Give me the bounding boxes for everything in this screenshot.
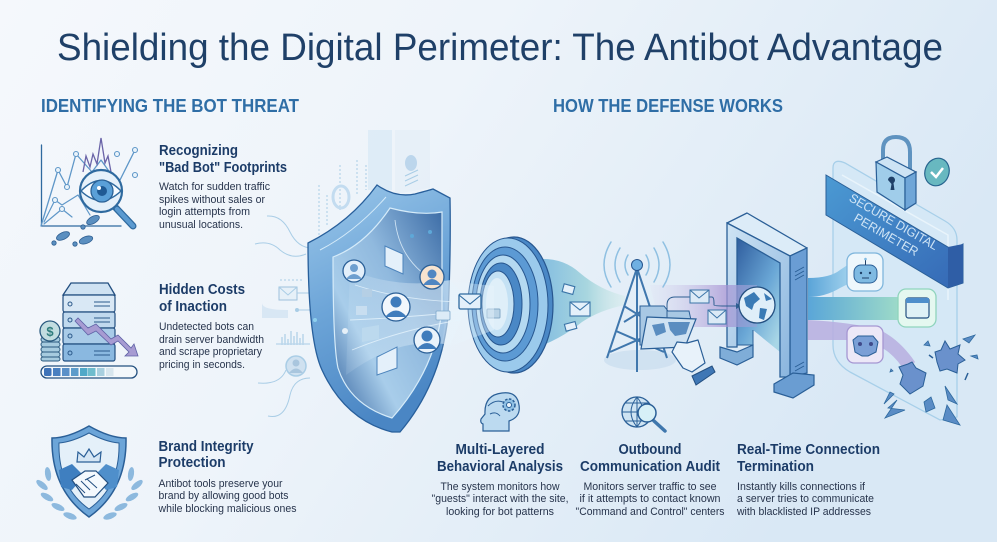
icon: globe <box>739 287 775 323</box>
text block: outbound communication audit: Monitors server traffic to see <box>584 481 716 493</box>
text block: real-time connection termination: Real-Time Connection <box>737 442 880 458</box>
text block: hidden costs of inaction <box>159 282 264 371</box>
text block: real-time connection termination: Instantly kills connections if <box>737 481 866 493</box>
text block: outbound communication audit: if it attempts to contact known <box>580 493 720 505</box>
funnel: traffic beam from ring to tower <box>530 259 625 350</box>
cards: robot, window and bad bot <box>847 253 936 363</box>
text block: recognizing bad bot footprints: "Bad Bot" Footprints <box>159 160 287 176</box>
small file in beam <box>436 311 450 320</box>
title: Shielding the Digital Perimeter: The Antibot Advantage <box>57 27 943 69</box>
banner: secure digital perimeter: SECURE DIGITAL <box>847 191 940 253</box>
text block: hidden costs of inaction: and scrape proprietary <box>159 346 262 358</box>
text block: multi-layered behavioral analysis: The system monitors how <box>440 481 560 493</box>
banner: secure digital perimeter <box>826 175 963 288</box>
text block: outbound communication audit: "Command and Control" centers <box>576 506 725 518</box>
small envelopes in funnel <box>562 284 590 331</box>
icon: globe with magnifier <box>622 397 665 431</box>
text block: hidden costs of inaction: Hidden Costs <box>159 282 245 298</box>
text block: real-time connection termination <box>736 442 880 518</box>
envelopes and route to globe <box>667 290 741 324</box>
text block: multi-layered behavioral analysis: "guests" interact with the site, <box>432 493 568 505</box>
text block: hidden costs of inaction: drain server bandwidth <box>159 334 264 346</box>
icon: folder with world map and hand <box>640 306 715 385</box>
heading: how the defense works: HOW THE DEFENSE WORKS <box>553 96 783 116</box>
icon: server with falling cost arrow <box>40 283 138 378</box>
text block: multi-layered behavioral analysis: Behavioral Analysis <box>437 459 563 475</box>
purple beam through gate <box>650 285 757 327</box>
text block: recognizing bad bot footprints: Recognizing <box>159 143 238 159</box>
user avatars <box>343 260 444 353</box>
central shield <box>308 185 470 432</box>
text block: multi-layered behavioral analysis <box>432 442 568 518</box>
envelope: entering ring <box>459 294 481 309</box>
icon: bad bot footprints chart <box>41 138 138 246</box>
ring: behavioral analysis scanner <box>468 237 553 373</box>
text block: real-time connection termination: Termination <box>737 459 814 475</box>
text block: outbound communication audit: Outbound <box>618 442 682 458</box>
text block: brand integrity protection: Protection <box>158 455 226 471</box>
banner: secure digital perimeter: PERIMETER <box>851 211 921 259</box>
text block: outbound communication audit <box>576 442 725 518</box>
icon: shattered bad bots <box>884 335 978 425</box>
text block: brand integrity protection: while blocking malicious ones <box>158 503 297 515</box>
text block: hidden costs of inaction: pricing in seconds. <box>159 359 245 371</box>
icon: check badge <box>921 155 953 189</box>
heading: identifying the bot threat: IDENTIFYING THE BOT THREAT <box>41 96 299 116</box>
text block: recognizing bad bot footprints: login attempts from <box>159 206 250 218</box>
text block: brand integrity protection: Brand Integrity <box>158 439 254 455</box>
icon: server with falling cost arrow: $ <box>46 324 54 339</box>
text block: hidden costs of inaction: Undetected bots can <box>159 321 254 333</box>
text block: brand integrity protection <box>158 439 297 515</box>
text block: multi-layered behavioral analysis: looking for bot patterns <box>446 506 554 518</box>
icon: brand shield with handshake <box>35 426 144 521</box>
text block: outbound communication audit: Communication Audit <box>580 459 720 475</box>
text block: recognizing bad bot footprints: Watch for sudden traffic <box>159 181 270 193</box>
icon: padlock <box>876 137 916 210</box>
text block: brand integrity protection: brand by allowing good bots <box>158 490 289 502</box>
icon: brain with gear <box>481 393 519 431</box>
text block: real-time connection termination: with blacklisted IP addresses <box>736 506 871 518</box>
text block: hidden costs of inaction: of Inaction <box>159 299 227 315</box>
decorative circuit lines with envelope and user icons <box>255 130 430 417</box>
beams from shield into ring <box>440 280 494 350</box>
text block: recognizing bad bot footprints: spikes without sales or <box>159 194 265 206</box>
data beams to cards <box>808 262 915 372</box>
text block: real-time connection termination: a server tries to communicate <box>737 493 874 505</box>
text block: brand integrity protection: Antibot tools preserve your <box>158 478 283 490</box>
text block: recognizing bad bot footprints: unusual locations. <box>159 219 243 231</box>
icon: outbound security gate <box>720 213 814 398</box>
icon: cell tower with signal waves <box>604 242 676 372</box>
documents <box>356 246 403 375</box>
text block: recognizing bad bot footprints <box>159 143 287 231</box>
panel: secure digital perimeter <box>833 161 957 420</box>
text block: multi-layered behavioral analysis: Multi-Layered <box>456 442 544 458</box>
